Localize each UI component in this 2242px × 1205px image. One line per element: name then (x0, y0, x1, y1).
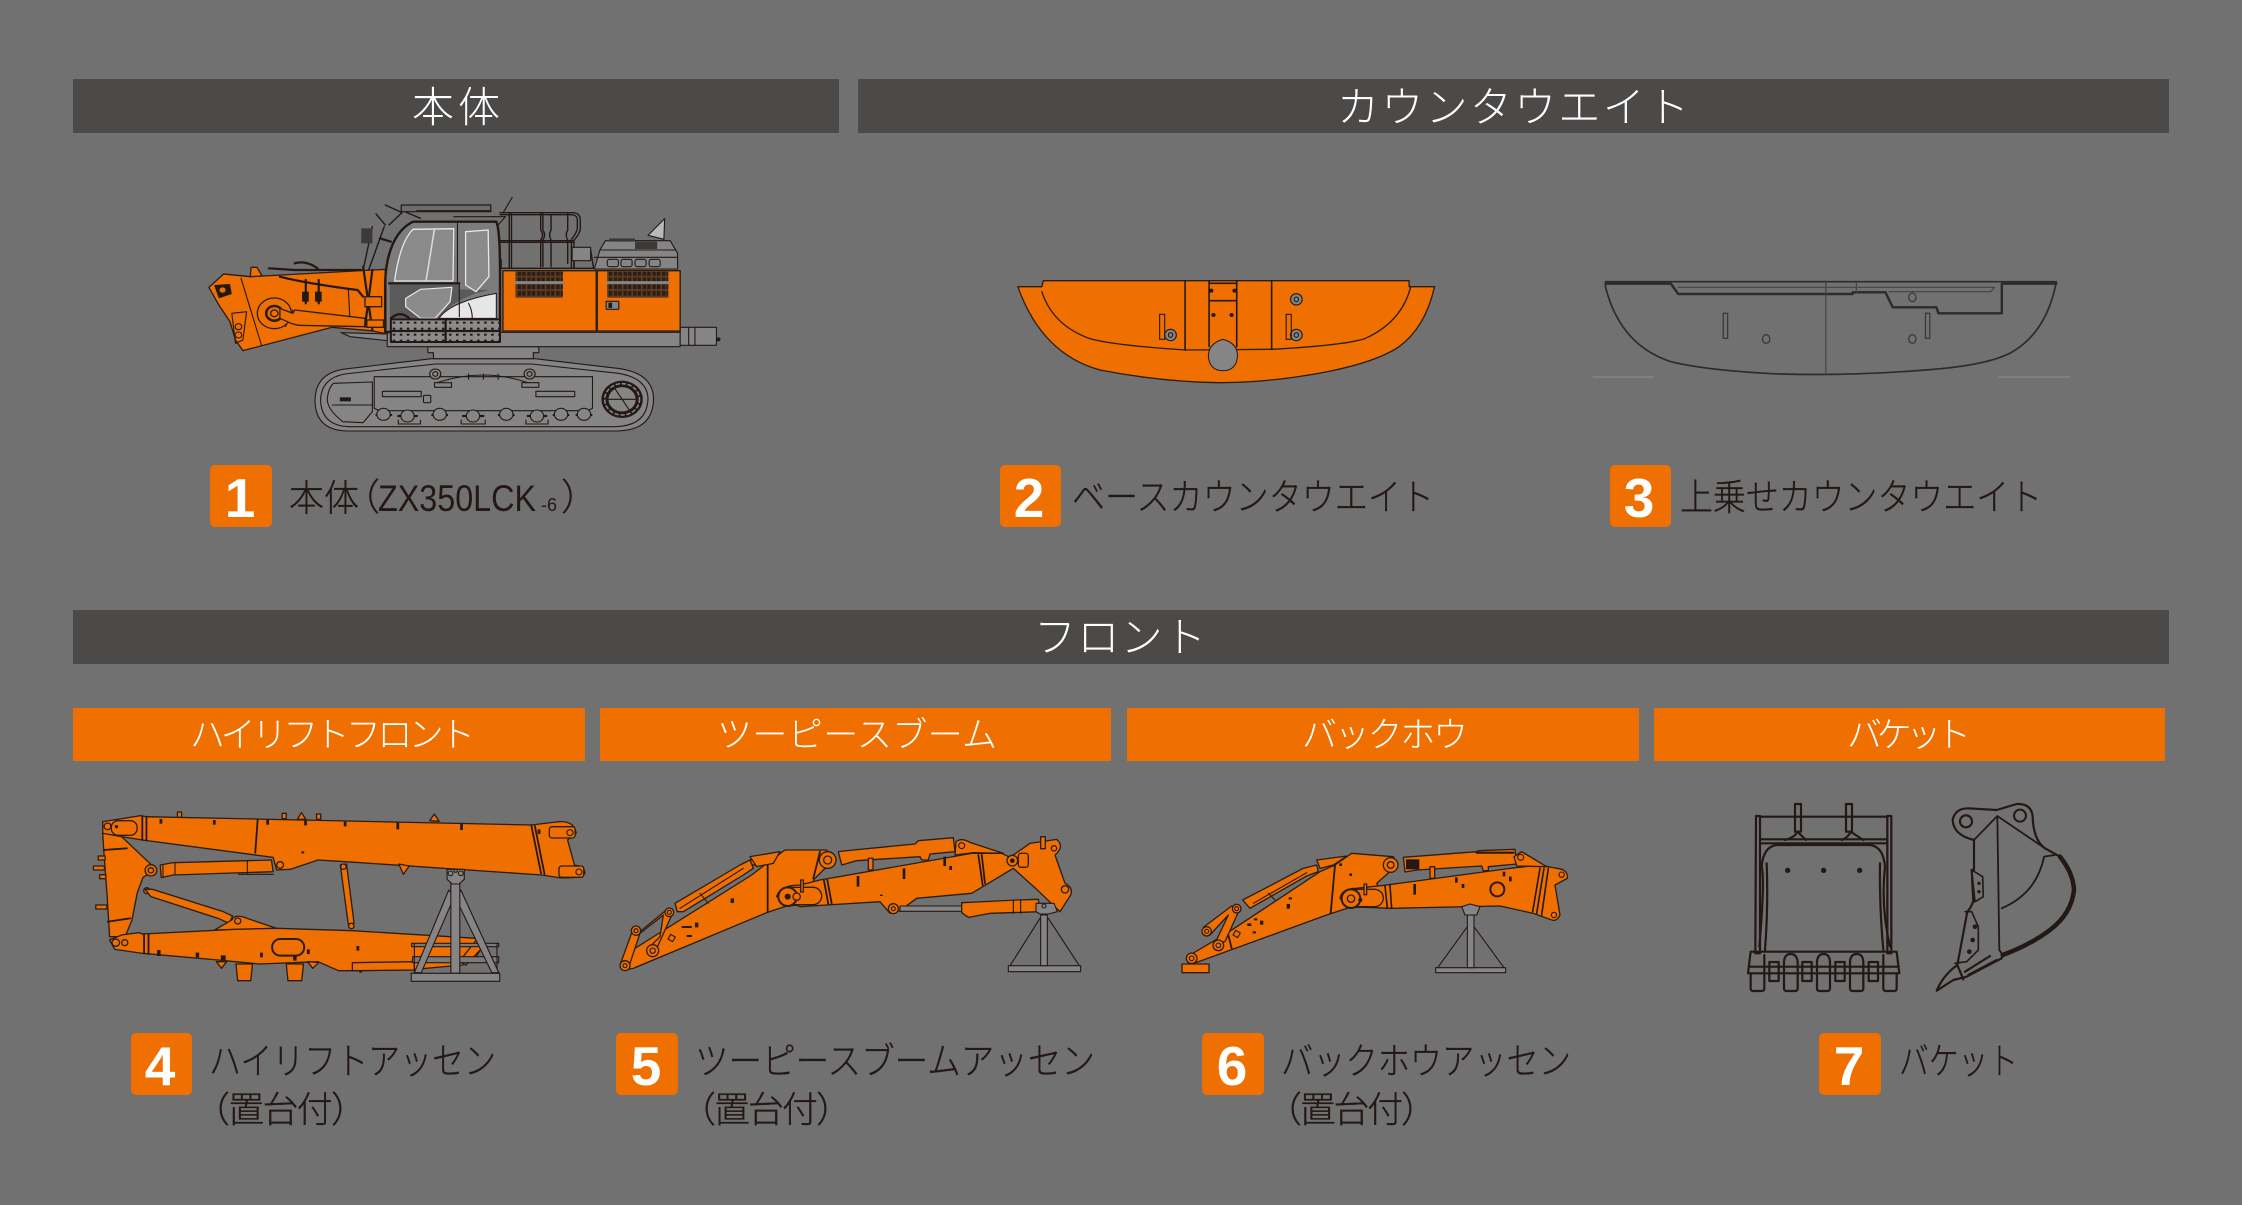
boom cylinder (900, 899, 1040, 917)
subheading: バケット: バケット (1847, 716, 1971, 755)
stand (1436, 904, 1506, 973)
illustration: high lift front (93, 812, 585, 981)
drive sprocket (601, 381, 643, 418)
cab (361, 205, 506, 332)
upper cylinder (160, 860, 273, 878)
lower cylinder and strut (145, 864, 354, 930)
label: item 4: （置台付） (194, 1089, 367, 1130)
left column and links (93, 833, 157, 937)
label: item 1: ） (561, 477, 598, 518)
subheading: ツーピースブーム (600, 708, 1111, 761)
label: item 6: バックホウアッセン (1281, 1041, 1571, 1082)
arm cylinder and link (819, 838, 1003, 870)
badge 6 (1202, 1033, 1264, 1097)
label: item 1: ZX350LCK (378, 478, 536, 519)
badge 5 (616, 1033, 678, 1097)
badge 6: 6 (1217, 1035, 1247, 1097)
label: item 1: -6 (541, 495, 557, 515)
stand (1008, 903, 1081, 972)
badge 2: 2 (1014, 467, 1044, 529)
badge 3: 3 (1624, 467, 1654, 529)
badge 4 (131, 1033, 192, 1097)
label: item 5: ツーピースブームアッセン (695, 1041, 1095, 1082)
illustration: top counterweight (1593, 281, 2069, 377)
label: item 5: （置台付） (680, 1089, 852, 1130)
badge 2 (1000, 465, 1061, 529)
heading: 本体 (73, 79, 839, 133)
heading: 本体: 本体 (412, 84, 500, 131)
label: item 7: バケット (1899, 1041, 2018, 1082)
label: item 6 (1202, 1033, 1571, 1130)
badge 5: 5 (631, 1035, 661, 1097)
label: item 3: 上乗せカウンタウエイト (1680, 477, 2042, 518)
badge 1 (210, 465, 272, 529)
subheading: バケット (1654, 708, 2165, 761)
subheading: ツーピースブーム: ツーピースブーム (717, 716, 997, 755)
label: item 3 (1610, 465, 2042, 529)
support block (1182, 964, 1209, 973)
subheading: ハイリフトフロント: ハイリフトフロント (190, 716, 475, 755)
engine hood and exhaust (594, 219, 678, 269)
label: item 1: （ (343, 477, 380, 518)
boom (777, 837, 1071, 914)
heading: フロント: フロント (1034, 614, 1206, 661)
heading: フロント (73, 610, 2169, 664)
arm (620, 850, 834, 971)
label: item 7 (1819, 1033, 2018, 1097)
badge 1: 1 (225, 467, 255, 529)
bucket side view (1937, 804, 2074, 991)
label: item 2 (1000, 465, 1434, 529)
handrail (500, 197, 594, 268)
illustration: excavator body (209, 197, 720, 431)
label: item 4: ハイリフトアッセン (209, 1041, 496, 1082)
badge 4: 4 (145, 1035, 176, 1097)
house orange panels (503, 271, 680, 331)
label: item 6: （置台付） (1266, 1089, 1437, 1130)
stand (411, 869, 500, 981)
arm (1186, 853, 1397, 964)
subheading: バックホウ: バックホウ (1302, 716, 1468, 755)
badge 3 (1610, 465, 1671, 529)
illustration: two-piece boom (620, 837, 1081, 972)
lower frame and swing (341, 327, 720, 359)
heading: カウンタウエイト (858, 79, 2169, 133)
undercarriage track (315, 359, 654, 431)
lower boom (110, 928, 485, 981)
illustration: base counterweight (1018, 281, 1435, 383)
subheading: ハイリフトフロント (73, 708, 585, 761)
label: item 2: ベースカウンタウエイト (1072, 477, 1434, 518)
heading: カウンタウエイト: カウンタウエイト (1337, 84, 1689, 131)
upper boom (103, 812, 585, 878)
boom (1340, 865, 1567, 920)
label: item 1 (210, 465, 598, 529)
arm cylinder and link (1383, 849, 1547, 878)
illustration: buckets (1748, 804, 2074, 991)
illustration: backhoe (1182, 849, 1567, 973)
badge 7: 7 (1834, 1035, 1864, 1097)
bucket front view (1748, 804, 1899, 991)
mesh guard (391, 314, 500, 342)
subheading: バックホウ (1127, 708, 1639, 761)
badge 7 (1819, 1033, 1881, 1097)
label: item 1: 本体 (289, 478, 359, 519)
label: item 4 (131, 1033, 496, 1130)
front boom stub (209, 262, 385, 351)
label: item 5 (616, 1033, 1095, 1130)
